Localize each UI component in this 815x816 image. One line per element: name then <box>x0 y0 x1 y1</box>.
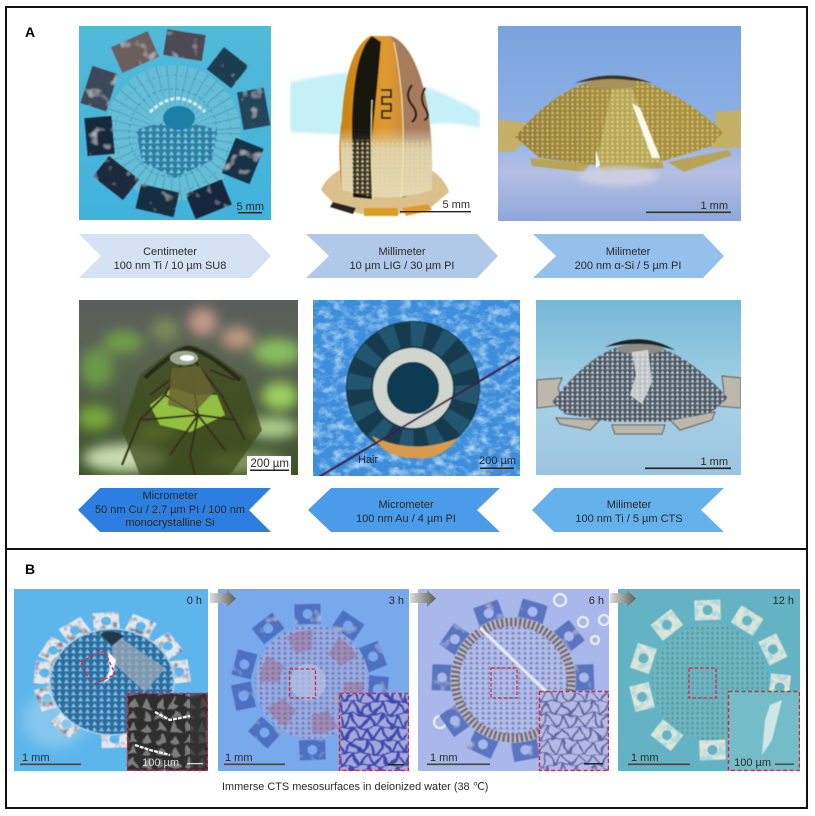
scale bar: 1 mm <box>645 456 731 469</box>
photo: 6 h <box>418 589 609 771</box>
time label: 6 h: 6 h <box>589 595 604 607</box>
arrow label: millimeter a-Si <box>533 234 724 278</box>
photo: micrometer Au/PI with hair <box>313 300 520 476</box>
photo: millimeter a-Si/PI dome <box>498 26 741 221</box>
scale bar: 5 mm: 5 mm <box>442 199 470 211</box>
scale bar: 1 mm <box>427 752 490 765</box>
divider between sections A and B <box>6 548 807 550</box>
section label B: B <box>25 561 35 577</box>
time label: 0 h: 0 h <box>187 595 202 607</box>
scale bar: 1 mm: 1 mm <box>225 752 252 764</box>
arrow label: centimeter <box>79 234 271 278</box>
arrow label: micrometer Cu: monocrystalline Si <box>125 517 215 529</box>
scale bar: 1 mm: 1 mm <box>22 752 50 764</box>
inset: 100 um close-up <box>728 691 800 771</box>
arrow label: millimeter Ti/CTS: Milimeter <box>607 499 652 511</box>
scale bar: 1 mm: 1 mm <box>631 752 658 764</box>
time label: 3 h: 3 h <box>389 595 404 607</box>
photo: 0 h <box>14 589 208 771</box>
marker: red square <box>290 669 316 698</box>
scale bar: 200 um <box>247 456 291 475</box>
photo: millimeter LIG/PI bell-shaped structure <box>290 35 480 217</box>
scale bar: 200 um: 200 µm <box>479 455 516 467</box>
scale bar: 200 um: 200 µm <box>250 458 289 470</box>
arrow label: micrometer Cu <box>78 488 271 532</box>
inset: close-up <box>539 691 609 771</box>
arrow label: micrometer Au <box>308 488 500 532</box>
arrow label: centimeter: Centimeter <box>143 246 197 258</box>
inset: close-up <box>339 693 409 771</box>
arrow label: millimeter LIG: Millimeter <box>378 246 426 258</box>
arrow label: millimeter LIG: 10 µm LIG / 30 µm PI <box>350 260 454 272</box>
photo: 12 h <box>618 589 800 771</box>
scale bar: 1 mm: 1 mm <box>430 752 458 764</box>
caption: Immerse CTS mesosurfaces in deionized water (38 ℃) <box>222 781 488 793</box>
inset: 100 um close-up: 100 µm <box>734 757 771 769</box>
scale bar: 1 mm <box>224 752 285 765</box>
photo: millimeter Ti/CTS dome <box>536 300 741 475</box>
process arrow 1 <box>210 590 236 607</box>
arrow label: micrometer Cu: Micrometer <box>142 490 198 502</box>
process arrow 3 <box>610 590 636 607</box>
text: hair label: Hair <box>358 454 379 466</box>
scale bar: 1 mm: 1 mm <box>700 200 728 212</box>
photo: centimeter Ti/SU8 mesosurface <box>79 26 271 220</box>
time label: 12 h: 12 h <box>773 595 794 607</box>
arrow label: centimeter: 100 nm Ti / 10 µm SU8 <box>114 260 226 272</box>
inset: 100 um close-up: 100 µm <box>142 757 179 769</box>
arrow label: millimeter Ti/CTS: 100 nm Ti / 5 µm CTS <box>575 513 683 525</box>
marker: red square <box>81 651 115 685</box>
scale bar: 1 mm: 1 mm <box>700 456 728 468</box>
arrow label: millimeter LIG <box>306 234 498 278</box>
scale bar: 1 mm <box>646 200 731 213</box>
inset: 100 um close-up <box>127 693 208 771</box>
arrow label: millimeter Ti/CTS <box>532 488 724 532</box>
marker: red square <box>491 668 517 698</box>
scale bar: 5 mm: 5 mm <box>236 201 264 213</box>
process arrow 2 <box>410 590 436 607</box>
arrow label: millimeter a-Si: 200 nm α-Si / 5 µm PI <box>575 260 681 272</box>
photo: micrometer Cu/PI/Si structure on moss <box>79 300 298 475</box>
arrow label: micrometer Cu: 50 nm Cu / 2.7 µm PI / 100 nm <box>95 504 245 516</box>
scale bar: 5 mm <box>400 199 471 212</box>
scale bar: 1 mm <box>628 752 690 765</box>
scale bar: 1 mm <box>20 752 81 765</box>
section label A: A <box>25 24 35 40</box>
arrow label: millimeter a-Si: Milimeter <box>606 246 651 258</box>
photo: 3 h <box>218 589 409 771</box>
arrow label: micrometer Au: Micrometer <box>378 499 434 511</box>
marker: red square <box>689 668 716 698</box>
arrow label: micrometer Au: 100 nm Au / 4 µm PI <box>356 513 456 525</box>
